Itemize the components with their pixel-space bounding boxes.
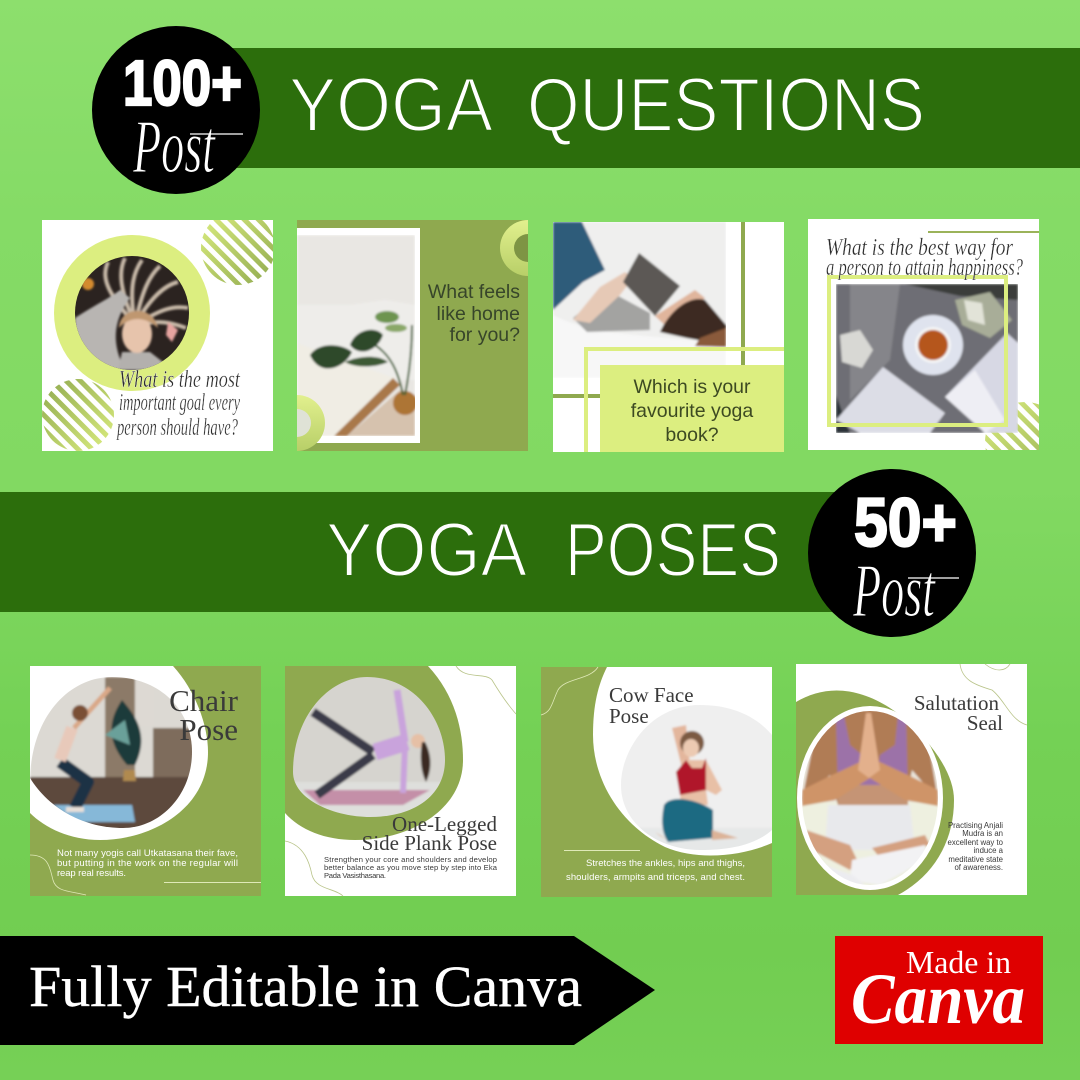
badge number: 50+	[854, 484, 957, 561]
script question text: person should have?	[116, 415, 238, 441]
description: excellent way to	[948, 838, 1004, 847]
stripe circle top right	[201, 220, 273, 285]
description	[948, 821, 1004, 872]
description: Mudra is an	[962, 829, 1003, 838]
description: induce a	[974, 846, 1004, 855]
title: Salutation	[914, 691, 999, 715]
title	[914, 691, 1003, 735]
title: Cow Face	[609, 683, 694, 707]
title: Side Plank Pose	[362, 831, 497, 855]
description: but putting in the work on the regular will	[57, 858, 238, 869]
heading: yoga questions: QUESTIONS	[527, 63, 925, 148]
description: Stretches the ankles, hips and thighs,	[586, 858, 745, 869]
photo: tea and books	[836, 284, 1018, 433]
script question text	[116, 367, 241, 441]
photo: bed with plant	[297, 235, 417, 436]
heading: yoga poses: POSES	[565, 508, 781, 593]
banner: fully editable in canva	[0, 936, 655, 1045]
panel: question card 1	[42, 210, 276, 452]
panel: question card 4	[808, 219, 1039, 450]
description: Strengthen your core and shoulders and develop	[324, 855, 497, 864]
white blob	[593, 667, 772, 856]
question text: What feels	[428, 281, 520, 303]
script question text: What is the most	[119, 367, 241, 393]
heading: yoga poses	[326, 508, 781, 593]
lime outline frame	[586, 349, 784, 452]
description: Pada Vasisthasana.	[324, 871, 386, 880]
script question text	[826, 235, 1023, 281]
description: reap real results.	[57, 868, 126, 879]
title	[169, 683, 239, 747]
lime ring top right	[500, 220, 528, 276]
description: meditative state	[948, 855, 1003, 864]
question text	[631, 376, 753, 446]
title	[609, 683, 694, 728]
white rule	[164, 882, 261, 883]
badge: 50+ post	[808, 469, 976, 637]
panel: salutation seal	[796, 664, 1027, 895]
olive horizontal bar	[553, 394, 600, 398]
badge number: 100+	[123, 47, 242, 119]
question text: favourite yoga	[631, 400, 753, 422]
title	[362, 812, 497, 855]
heading: yoga questions	[289, 63, 925, 148]
description	[566, 858, 745, 883]
question text: like home	[437, 303, 520, 325]
photo: side plank pose	[290, 675, 450, 820]
panel: one-legged side plank pose	[285, 666, 516, 896]
photo: cow face pose	[621, 705, 772, 850]
lime ring bottom left	[297, 395, 325, 451]
description	[57, 848, 238, 879]
canva wordmark: Canva	[851, 959, 1025, 1039]
title: Pose	[179, 712, 238, 747]
photo: chair pose	[30, 677, 195, 832]
olive top line	[928, 231, 1039, 233]
panel: question card 2	[297, 220, 528, 451]
description: Not many yogis call Utkatasana their fave,	[57, 848, 238, 859]
heading: yoga questions: YOGA	[289, 63, 493, 148]
badge script word: Post	[132, 105, 216, 189]
photo: hands in prayer	[800, 708, 940, 892]
heading: yoga poses: YOGA	[326, 508, 527, 593]
banner: yoga questions	[170, 48, 1080, 168]
white photo frame	[297, 228, 420, 443]
stripe circle bottom right	[985, 402, 1039, 450]
made in text: Made in	[906, 944, 1011, 980]
question text: for you?	[450, 324, 520, 346]
lime photo frame	[829, 277, 1006, 425]
white rule	[564, 850, 640, 851]
title: Pose	[609, 704, 649, 728]
photo: woman with book on face	[553, 222, 726, 347]
olive vertical bar	[741, 222, 745, 365]
question text: book?	[665, 424, 719, 446]
script question text: important goal every	[119, 390, 240, 416]
olive blob	[796, 691, 954, 895]
badge: made in canva	[835, 936, 1043, 1044]
photo: woman with spread hair	[75, 256, 189, 370]
title: One-Legged	[392, 812, 497, 836]
white oval	[797, 706, 943, 890]
panel: cow face pose	[541, 667, 775, 897]
title: Seal	[967, 711, 1003, 735]
question text: Which is your	[633, 376, 751, 398]
panel: chair pose	[30, 666, 261, 896]
banner text: Fully Editable in Canva	[29, 954, 582, 1019]
stripe circle bottom left	[42, 378, 114, 452]
description	[324, 855, 498, 880]
question text	[428, 281, 520, 346]
lime text box	[600, 365, 784, 452]
lime ring	[54, 235, 210, 391]
description: of awareness.	[954, 863, 1003, 872]
banner: yoga poses	[0, 492, 890, 612]
olive blob	[285, 666, 463, 840]
description: Practising Anjali	[948, 821, 1003, 830]
panel: question card 3	[553, 222, 784, 452]
script question text: What is the best way for	[826, 235, 1014, 261]
badge: 100+ post	[92, 26, 260, 194]
white blob	[30, 666, 208, 840]
description: shoulders, armpits and triceps, and chest.	[566, 872, 745, 883]
description: better balance as you move step by step into Eka	[324, 863, 498, 872]
title: Chair	[169, 683, 239, 718]
badge script word: Post	[852, 549, 936, 633]
